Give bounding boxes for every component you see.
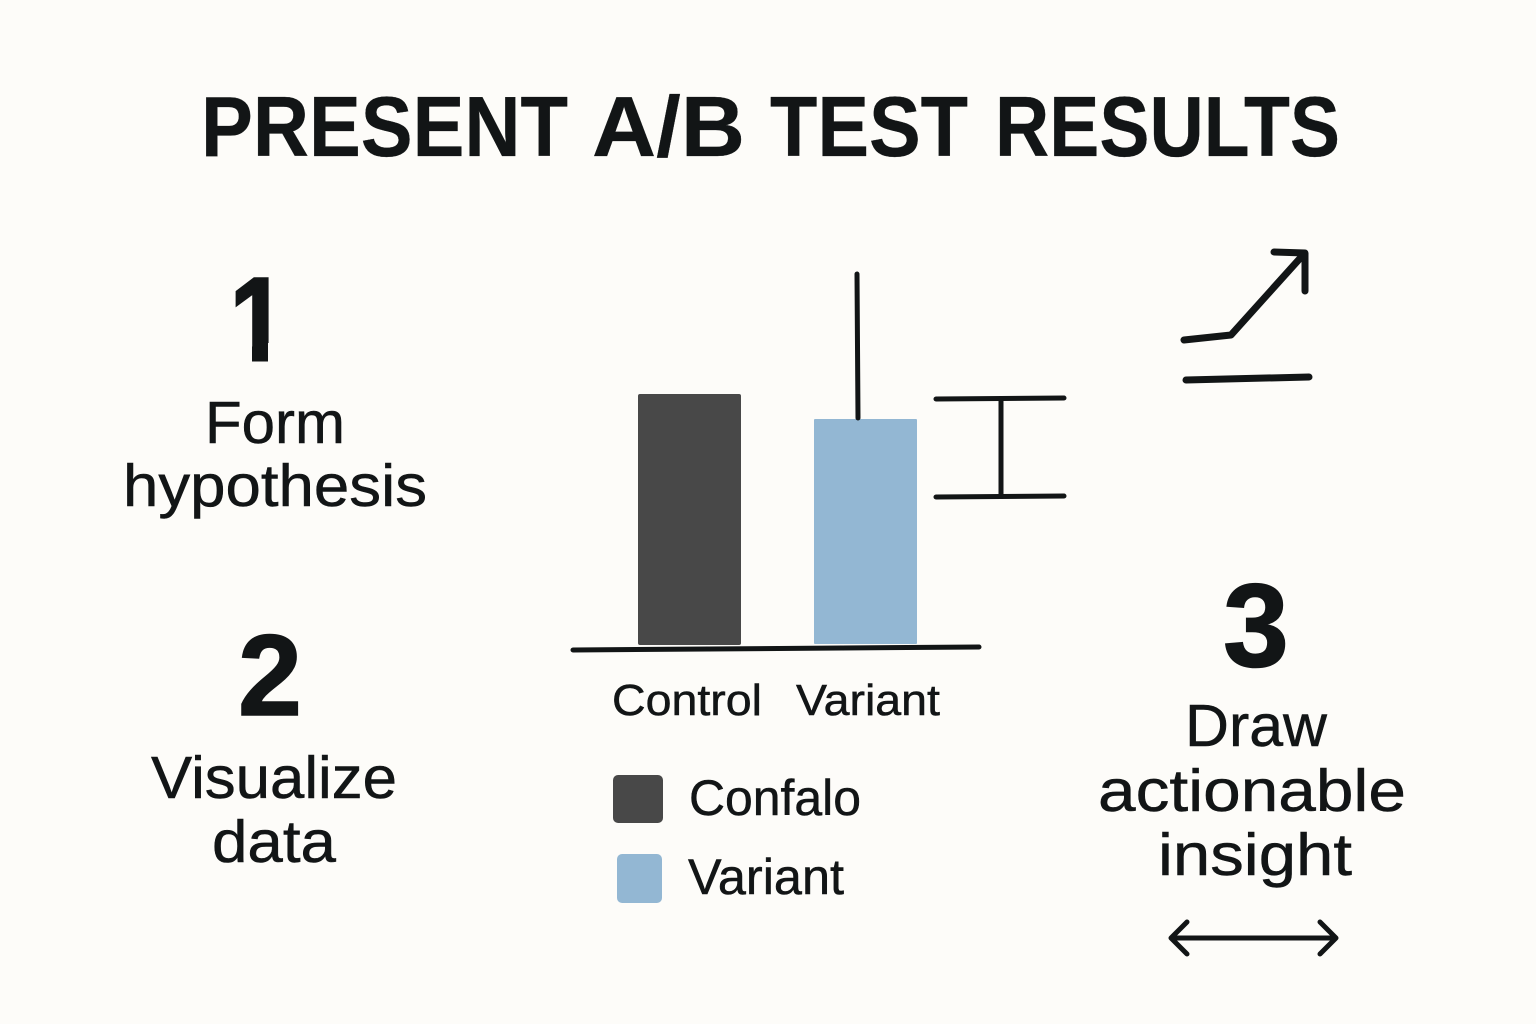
step 2 number: 2: [238, 612, 302, 740]
legend label: variant: Variant: [688, 849, 844, 905]
step 1 label: hypothesis: [123, 453, 427, 519]
title: RESULTS: [995, 80, 1340, 175]
bar chart: [573, 274, 979, 725]
step 1 number: 1: [230, 254, 286, 386]
step 3 label: Draw: [1185, 693, 1327, 759]
control bar: [638, 394, 741, 645]
step 3 label: insight: [1158, 822, 1352, 888]
step 1: form hypothesis: [127, 277, 425, 519]
title: A/B: [592, 80, 745, 175]
icon: upward trend arrow: [1184, 252, 1309, 380]
legend swatch: control: [613, 775, 663, 823]
step 3 number: 3: [1223, 560, 1289, 692]
control label: Control: [612, 676, 762, 725]
variant label: Variant: [796, 676, 940, 725]
step 2 label: data: [212, 809, 336, 875]
legend swatch: variant: [617, 854, 662, 903]
confidence interval bracket: [936, 398, 1064, 497]
step 2 label: Visualize: [151, 745, 397, 811]
title: PRESENT: [201, 80, 568, 175]
legend: [613, 770, 861, 905]
step 2: visualize data: [151, 612, 397, 875]
step 3: draw actionable insight: [1098, 560, 1406, 888]
variant bar: [814, 419, 917, 644]
step 1 label: Form: [205, 390, 345, 456]
step 3 label: actionable: [1098, 758, 1406, 824]
baseline axis: [573, 647, 979, 650]
icon: double-headed arrow: [1171, 922, 1336, 954]
legend label: control: Confalo: [689, 770, 861, 826]
title: TEST: [770, 80, 968, 175]
variant error line: [857, 274, 858, 418]
title: [201, 80, 1340, 175]
